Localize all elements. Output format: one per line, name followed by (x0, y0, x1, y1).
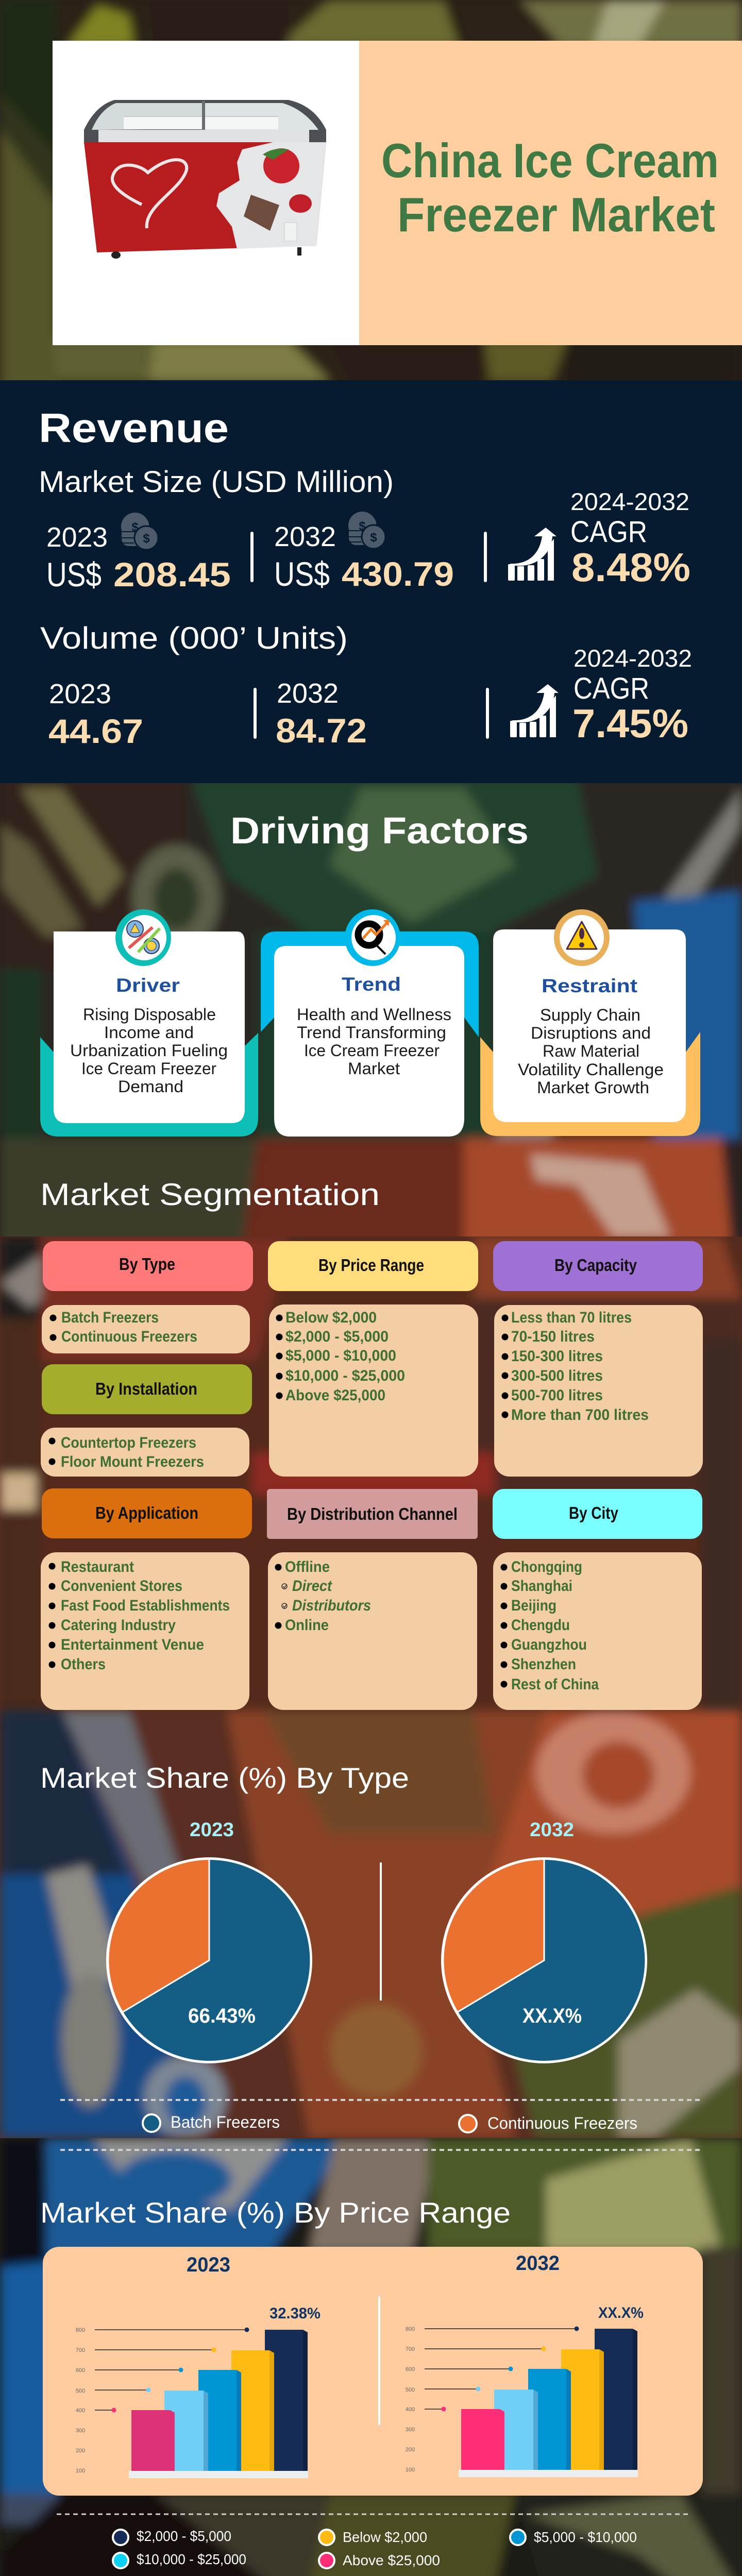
panel: by installation: Floor Mount Freezers (61, 1453, 204, 1470)
panel: by capacity: 500-700 litres (511, 1387, 603, 1404)
panel: by price range: Above $25,000 (285, 1387, 385, 1404)
value: 2023 market size: US$ (46, 555, 102, 594)
panel: price range charts (43, 2247, 703, 2496)
background photo: price share and key players (0, 2138, 742, 2576)
panel: by city: Chengdu (511, 1617, 570, 1634)
panel: by price range: Below $2,000 (285, 1309, 377, 1326)
heading: trend: Trend (342, 974, 401, 995)
icon: coins 2032: $ (359, 519, 366, 533)
bar chart: 2032: 300 (406, 2427, 415, 2433)
bar chart: 2032 (406, 2252, 644, 2477)
heading: driver: Driver (116, 975, 180, 996)
bar chart: 2023: 500 (76, 2388, 85, 2394)
legend: price range share: $5,000 - $10,000 (534, 2529, 637, 2545)
panel: revenue (0, 380, 742, 783)
text: cagr period: 2024-2032 (570, 488, 689, 515)
bar chart: 2032: 700 (406, 2346, 415, 2352)
panel: by capacity (493, 1241, 703, 1477)
panel: by application: Convenient Stores (61, 1578, 182, 1595)
text: volume cagr period: 2024-2032 (574, 645, 692, 672)
panel: restraint card (480, 909, 700, 1136)
text: trend description: Market (348, 1059, 400, 1078)
panel: by city: Beijing (511, 1597, 556, 1614)
legend: type share: Batch Freezers (171, 2113, 280, 2131)
panel: by capacity: Less than 70 litres (511, 1309, 632, 1326)
panel: by distribution channel: Distributors (292, 1597, 371, 1614)
text: 2023 year: 2023 (46, 522, 108, 553)
text: restraint description (518, 1006, 664, 1097)
icon: coins 2032 (348, 512, 385, 549)
text: driver description (70, 1005, 228, 1096)
bar chart: 2023: 400 (76, 2408, 85, 2414)
icon: restraint badge (554, 909, 610, 966)
legend: type share: Continuous Freezers (487, 2114, 637, 2132)
value: 2023 market size (46, 555, 231, 594)
legend: price range share: Above $25,000 (343, 2552, 440, 2568)
text: driver description: Income and (104, 1023, 194, 1042)
bar chart: 2023 (76, 2253, 321, 2478)
panel: by city: By City (569, 1503, 619, 1522)
value: volume 2023: 44.67 (48, 712, 143, 750)
panel: by capacity: 150-300 litres (511, 1348, 603, 1365)
background photo: top and driving factors (0, 0, 742, 1247)
panel: by application (41, 1488, 252, 1710)
icon: ice cream freezer (84, 100, 326, 259)
panel: by price range: $5,000 - $10,000 (285, 1347, 396, 1364)
value: 2032 market size: US$ (274, 555, 330, 593)
legend: price range share: $2,000 - $5,000 (137, 2528, 231, 2544)
pie chart: 2023: 66.43% (188, 2005, 256, 2027)
panel: by application: Catering Industry (61, 1617, 176, 1634)
panel: by city (493, 1489, 702, 1710)
text: volume 2032 year: 2032 (277, 678, 339, 709)
panel: by type (42, 1241, 253, 1353)
bar chart: 2023: 700 (76, 2347, 85, 2353)
icon: growth arrow volume (510, 684, 559, 737)
panel: by application: Restaurant (61, 1558, 134, 1575)
text: 2032 year: 2032 (274, 521, 336, 552)
panel: by application: Entertainment Venue (61, 1636, 204, 1653)
icon: driver badge (115, 909, 171, 966)
heading: market share by price range: Market Share (%) By Price Range (40, 2196, 511, 2229)
bar chart: 2023: 600 (76, 2367, 85, 2374)
bar chart: 2023: 800 (76, 2327, 85, 2333)
bar chart: 2032: 600 (406, 2366, 415, 2372)
panel: by city: Shanghai (511, 1578, 572, 1595)
bar chart: 2023: 100 (76, 2468, 85, 2474)
icon: growth arrow (508, 528, 556, 581)
bar chart: 2032: 2032 (516, 2252, 560, 2275)
text: trend description (297, 1005, 451, 1078)
panel: by installation: By Installation (95, 1379, 197, 1398)
panel: by price range: $2,000 - $5,000 (285, 1328, 389, 1345)
hero panel: freezer image (53, 41, 359, 345)
panel: by application: Fast Food Establishments (61, 1597, 230, 1614)
panel: driver card (40, 909, 258, 1137)
panel: by price range: By Price Range (318, 1256, 424, 1275)
bar chart: 2023: 200 (76, 2448, 85, 2454)
pie chart: 2023: 2023 (190, 1819, 234, 1841)
text: volume 2023 year: 2023 (49, 679, 111, 709)
text: restraint description: Supply Chain (540, 1006, 640, 1024)
panel: by type: By Type (119, 1255, 175, 1274)
bar chart: 2032: 200 (406, 2447, 415, 2453)
bar chart: 2023: 300 (76, 2428, 85, 2434)
bar chart: 2032: 400 (406, 2406, 415, 2413)
icon: coins 2023 (121, 513, 158, 550)
panel: by application: Others (61, 1656, 106, 1673)
bar chart: 2032: 800 (406, 2326, 415, 2332)
hero panel: title (359, 41, 742, 345)
icon: trend badge (345, 909, 400, 966)
background photo: segmentation and type share (0, 1236, 742, 2138)
pie chart: 2023 (106, 1819, 312, 2063)
bar chart: 2032: 500 (406, 2387, 415, 2393)
panel: by distribution channel: Offline (285, 1558, 330, 1575)
panel: by type: Continuous Freezers (61, 1328, 197, 1345)
value: 2032 market size: 430.79 (342, 555, 454, 593)
panel: by city: Chongqing (511, 1558, 582, 1575)
heading: restraint: Restraint (542, 975, 637, 996)
text: volume cagr label: CAGR (574, 672, 649, 705)
text: driver description: Ice Cream Freezer (81, 1059, 216, 1078)
heading: driving factors: Driving Factors (230, 810, 529, 852)
panel: by capacity: 300-500 litres (511, 1367, 603, 1384)
pie chart: 2032 (441, 1819, 647, 2063)
icon: coins 2023: $ (143, 532, 150, 546)
panel: by distribution channel (267, 1489, 478, 1710)
bar chart: 2032: 100 (406, 2467, 415, 2473)
panel: by price range (268, 1241, 478, 1477)
panel: by type: Batch Freezers (61, 1309, 159, 1326)
text: driver description: Rising Disposable (83, 1005, 216, 1024)
panel: by capacity: By Capacity (554, 1256, 637, 1275)
panel: by installation (41, 1364, 252, 1477)
text: trend description: Health and Wellness (297, 1005, 451, 1024)
icon: coins 2032: $ (370, 531, 377, 545)
bar chart: 2032: XX.X% (598, 2304, 644, 2321)
text: trend description: Ice Cream Freezer (304, 1041, 440, 1060)
text: cagr label: CAGR (570, 515, 647, 549)
text: driver description: Demand (118, 1077, 183, 1096)
panel: by price range: $10,000 - $25,000 (285, 1367, 405, 1384)
bar chart: 2023: 2023 (187, 2253, 230, 2276)
bar chart: 2023: 32.38% (269, 2305, 321, 2322)
value: cagr volume: 7.45% (572, 701, 688, 746)
legend: price range share: Below $2,000 (343, 2529, 427, 2545)
text: restraint description: Market Growth (537, 1078, 649, 1097)
text: restraint description: Raw Material (543, 1042, 639, 1060)
panel: by application: By Application (95, 1503, 198, 1522)
value: volume 2032: 84.72 (276, 711, 367, 750)
value: 2023 market size: 208.45 (113, 555, 231, 594)
text: trend description: Trend Transforming (297, 1023, 446, 1042)
heading: market segmentation: Market Segmentation (40, 1177, 380, 1212)
panel: by city: Rest of China (511, 1676, 599, 1693)
title (381, 133, 719, 242)
heading: volume: Volume (000’ Units) (40, 621, 348, 655)
text: restraint description: Disruptions and (531, 1024, 651, 1042)
panel: by distribution channel: Direct (292, 1578, 333, 1595)
icon: coins 2023: $ (131, 520, 139, 534)
heading: revenue: Revenue (39, 405, 229, 451)
panel: by distribution channel: Online (285, 1617, 329, 1634)
heading: market share by type: Market Share (%) By Type (40, 1761, 409, 1794)
heading: market size: Market Size (USD Million) (39, 465, 394, 499)
value: cagr revenue: 8.48% (571, 545, 690, 590)
panel: by capacity: 70-150 litres (511, 1328, 595, 1345)
panel: by capacity: More than 700 litres (511, 1406, 649, 1423)
legend: type share (143, 2113, 637, 2132)
panel: trend card (261, 909, 479, 1137)
legend: price range share (113, 2528, 637, 2568)
value: 2032 market size (274, 555, 454, 593)
text: driver description: Urbanization Fueling (70, 1041, 228, 1060)
pie chart: 2032: XX.X% (522, 2005, 582, 2027)
title: Freezer Market (397, 188, 715, 242)
panel: by distribution channel: By Distribution Channel (287, 1504, 458, 1523)
text: restraint description: Volatility Challenge (518, 1060, 664, 1079)
panel: by city: Shenzhen (511, 1656, 576, 1673)
legend: price range share: $10,000 - $25,000 (137, 2551, 246, 2567)
pie chart: 2032: 2032 (530, 1819, 574, 1841)
panel: by city: Guangzhou (511, 1636, 587, 1653)
panel: by installation: Countertop Freezers (61, 1434, 196, 1451)
